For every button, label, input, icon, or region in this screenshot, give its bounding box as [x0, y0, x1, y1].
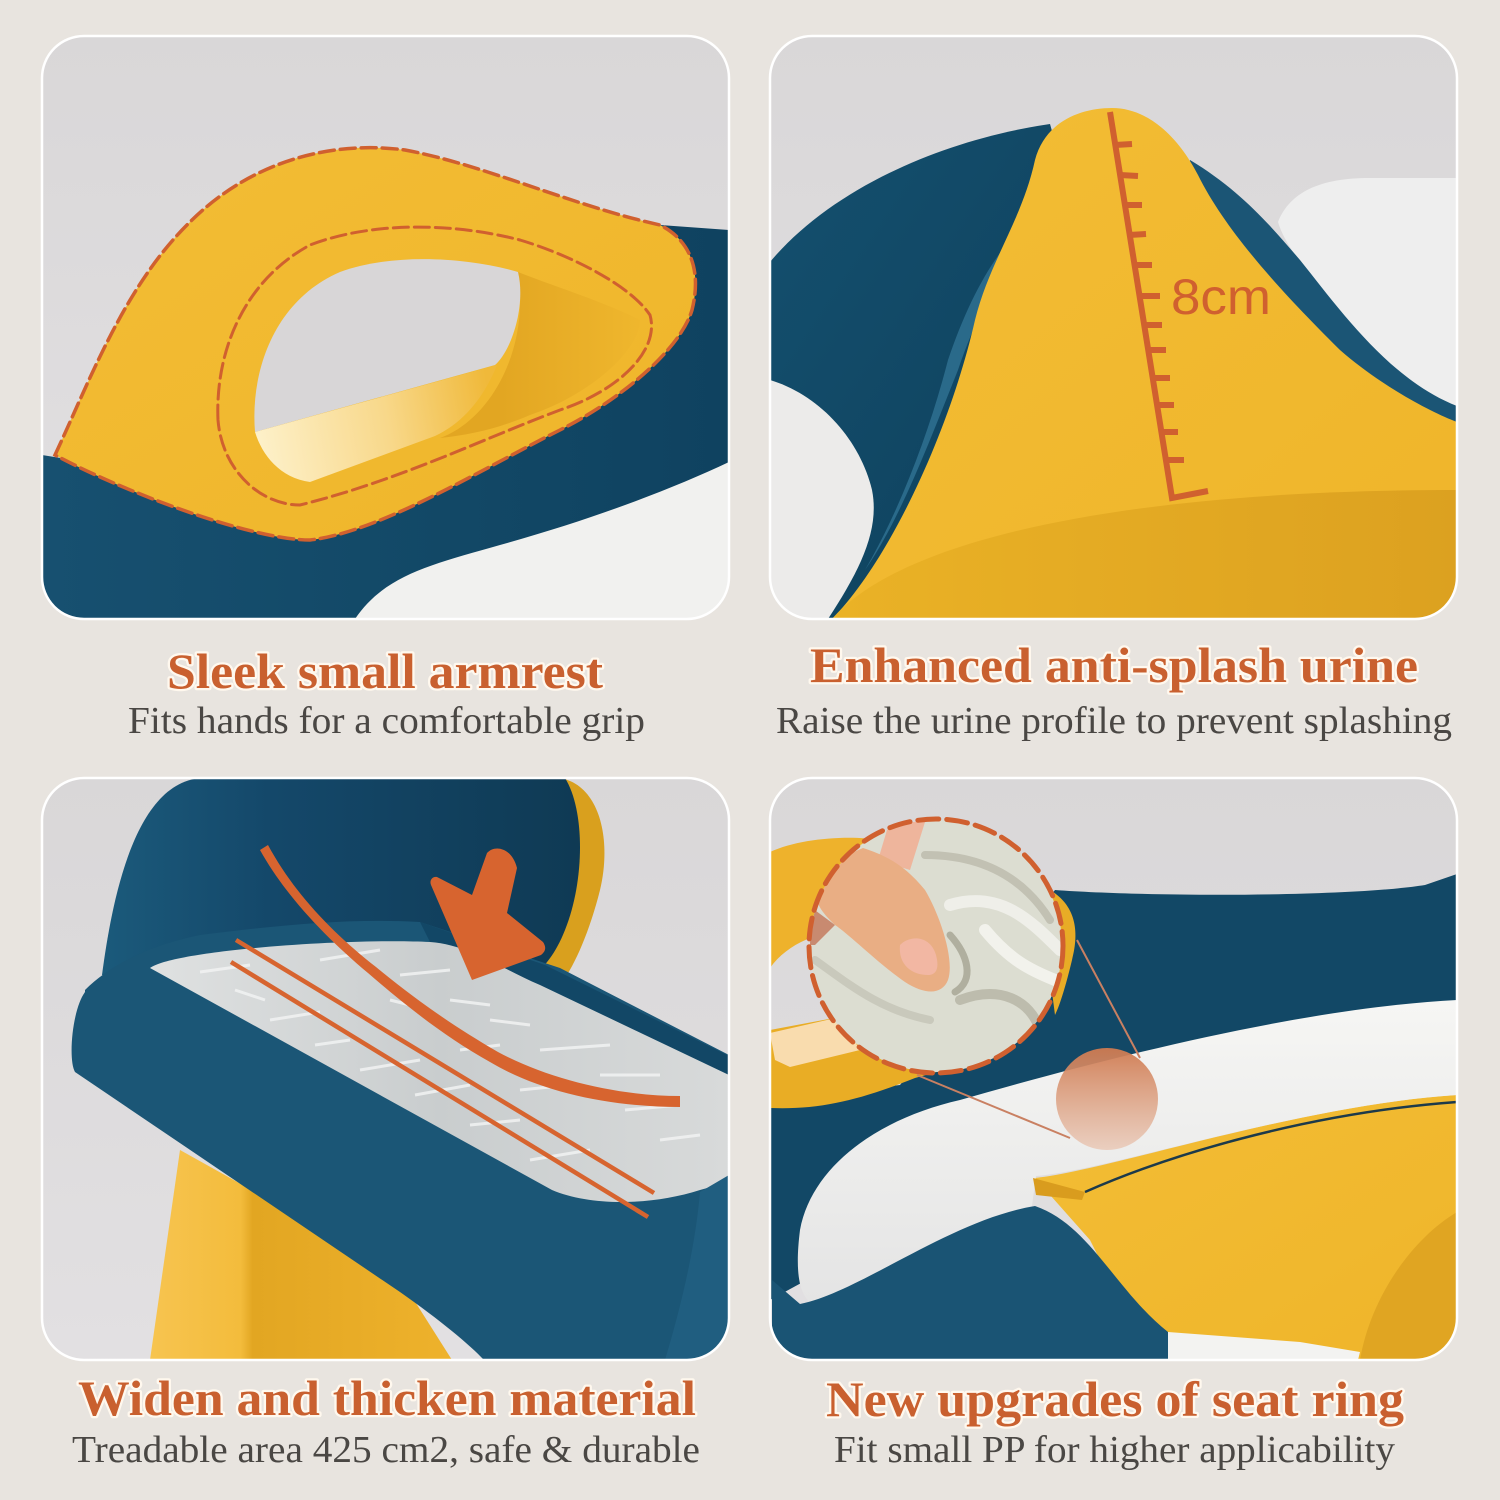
magnified fabric lens — [805, 815, 1067, 1077]
seat ring inner seam — [1085, 1102, 1457, 1192]
yellow leg — [150, 1150, 452, 1360]
panel backdrop — [44, 780, 728, 1228]
step illustration — [42, 778, 729, 1360]
panel border — [42, 36, 729, 619]
orange width arrow — [430, 848, 545, 980]
panel: enhanced anti-splash — [770, 36, 1457, 619]
yellow seat bowl — [1035, 1095, 1457, 1360]
white seat — [355, 462, 729, 619]
fingertip behind — [878, 820, 925, 870]
yellow edge beside lens — [1040, 890, 1076, 1015]
yellow splash guard — [832, 108, 1457, 619]
panel backdrop — [44, 38, 728, 458]
armrest right shading — [441, 272, 585, 438]
armrest inner dashed outline — [218, 227, 652, 505]
yellow back rim — [546, 779, 604, 972]
navy platform — [72, 921, 729, 1360]
heading: widen and thicken material: Widen and thicken material — [78, 1370, 696, 1426]
white side panel — [770, 380, 874, 619]
text: armrest description: Fits hands for a comfortable grip — [128, 700, 645, 742]
panel: widen and thicken material — [42, 778, 729, 1360]
heading: enhanced anti-splash urine: Enhanced anti-splash urine — [810, 637, 1418, 693]
panel backdrop — [772, 38, 1456, 260]
panel: new upgrades of seat ring — [770, 778, 1457, 1360]
text: anti-splash description: Raise the urine profile to prevent splashing — [776, 700, 1452, 742]
panel backdrop — [770, 778, 1457, 1360]
heading: new upgrades of seat ring: New upgrades of seat ring — [826, 1371, 1404, 1427]
seat ring clip edge — [1033, 1178, 1085, 1200]
height ruler — [1110, 112, 1208, 498]
armrest illustration — [42, 36, 729, 619]
highlighted touch spot — [1056, 1048, 1158, 1150]
thumbnail — [900, 938, 937, 975]
panel: sleek small armrest — [42, 36, 729, 619]
cream arm top — [770, 1017, 860, 1067]
thickness line upper — [236, 940, 654, 1193]
text: seat ring description: Fit small PP for higher applicability — [834, 1429, 1395, 1471]
white tread — [150, 941, 729, 1202]
panel border — [42, 778, 729, 1360]
lighter rim beside guard — [866, 254, 1000, 569]
navy body left — [771, 124, 1052, 618]
thickness line lower — [231, 962, 648, 1217]
navy front hump — [772, 1206, 1168, 1360]
panel border — [770, 778, 1457, 1360]
thumb — [817, 848, 950, 992]
leader line upper — [1077, 940, 1140, 1058]
white seat ring — [798, 1000, 1457, 1305]
navy potty body — [42, 225, 729, 619]
white bottom strip — [1168, 1332, 1360, 1360]
bowl darker front — [832, 490, 1457, 619]
lens dashed outline — [809, 819, 1063, 1073]
platform right side piece — [665, 1175, 729, 1360]
navy backrest — [102, 779, 580, 975]
fabric folds — [815, 855, 1060, 1030]
text: tread description: Treadable area 425 cm2, safe & durable — [72, 1429, 700, 1471]
heading: sleek small armrest: Sleek small armrest — [167, 643, 603, 699]
yellow armrest — [55, 148, 695, 540]
splash guard illustration — [770, 36, 1457, 619]
fabric — [805, 815, 1067, 1077]
navy body — [770, 874, 1457, 1300]
navy rim right — [1180, 160, 1457, 430]
yellow handle — [770, 838, 880, 968]
yellow lower arm — [770, 1015, 980, 1108]
armrest opening — [254, 259, 520, 432]
gap behind thumb — [805, 905, 835, 945]
dark yellow bowl side — [1360, 1212, 1457, 1360]
embossed letters — [200, 950, 700, 1160]
curved bend line — [260, 845, 680, 1107]
height label: 8cm — [1171, 269, 1271, 325]
platform back shelf — [420, 922, 729, 1075]
armrest outer dashed outline — [55, 148, 695, 540]
armrest opening lower surface — [255, 365, 497, 482]
panel border — [770, 36, 1457, 619]
leader line lower — [917, 1075, 1070, 1138]
white pillow seat — [1278, 178, 1457, 420]
seat ring illustration — [770, 778, 1457, 1360]
